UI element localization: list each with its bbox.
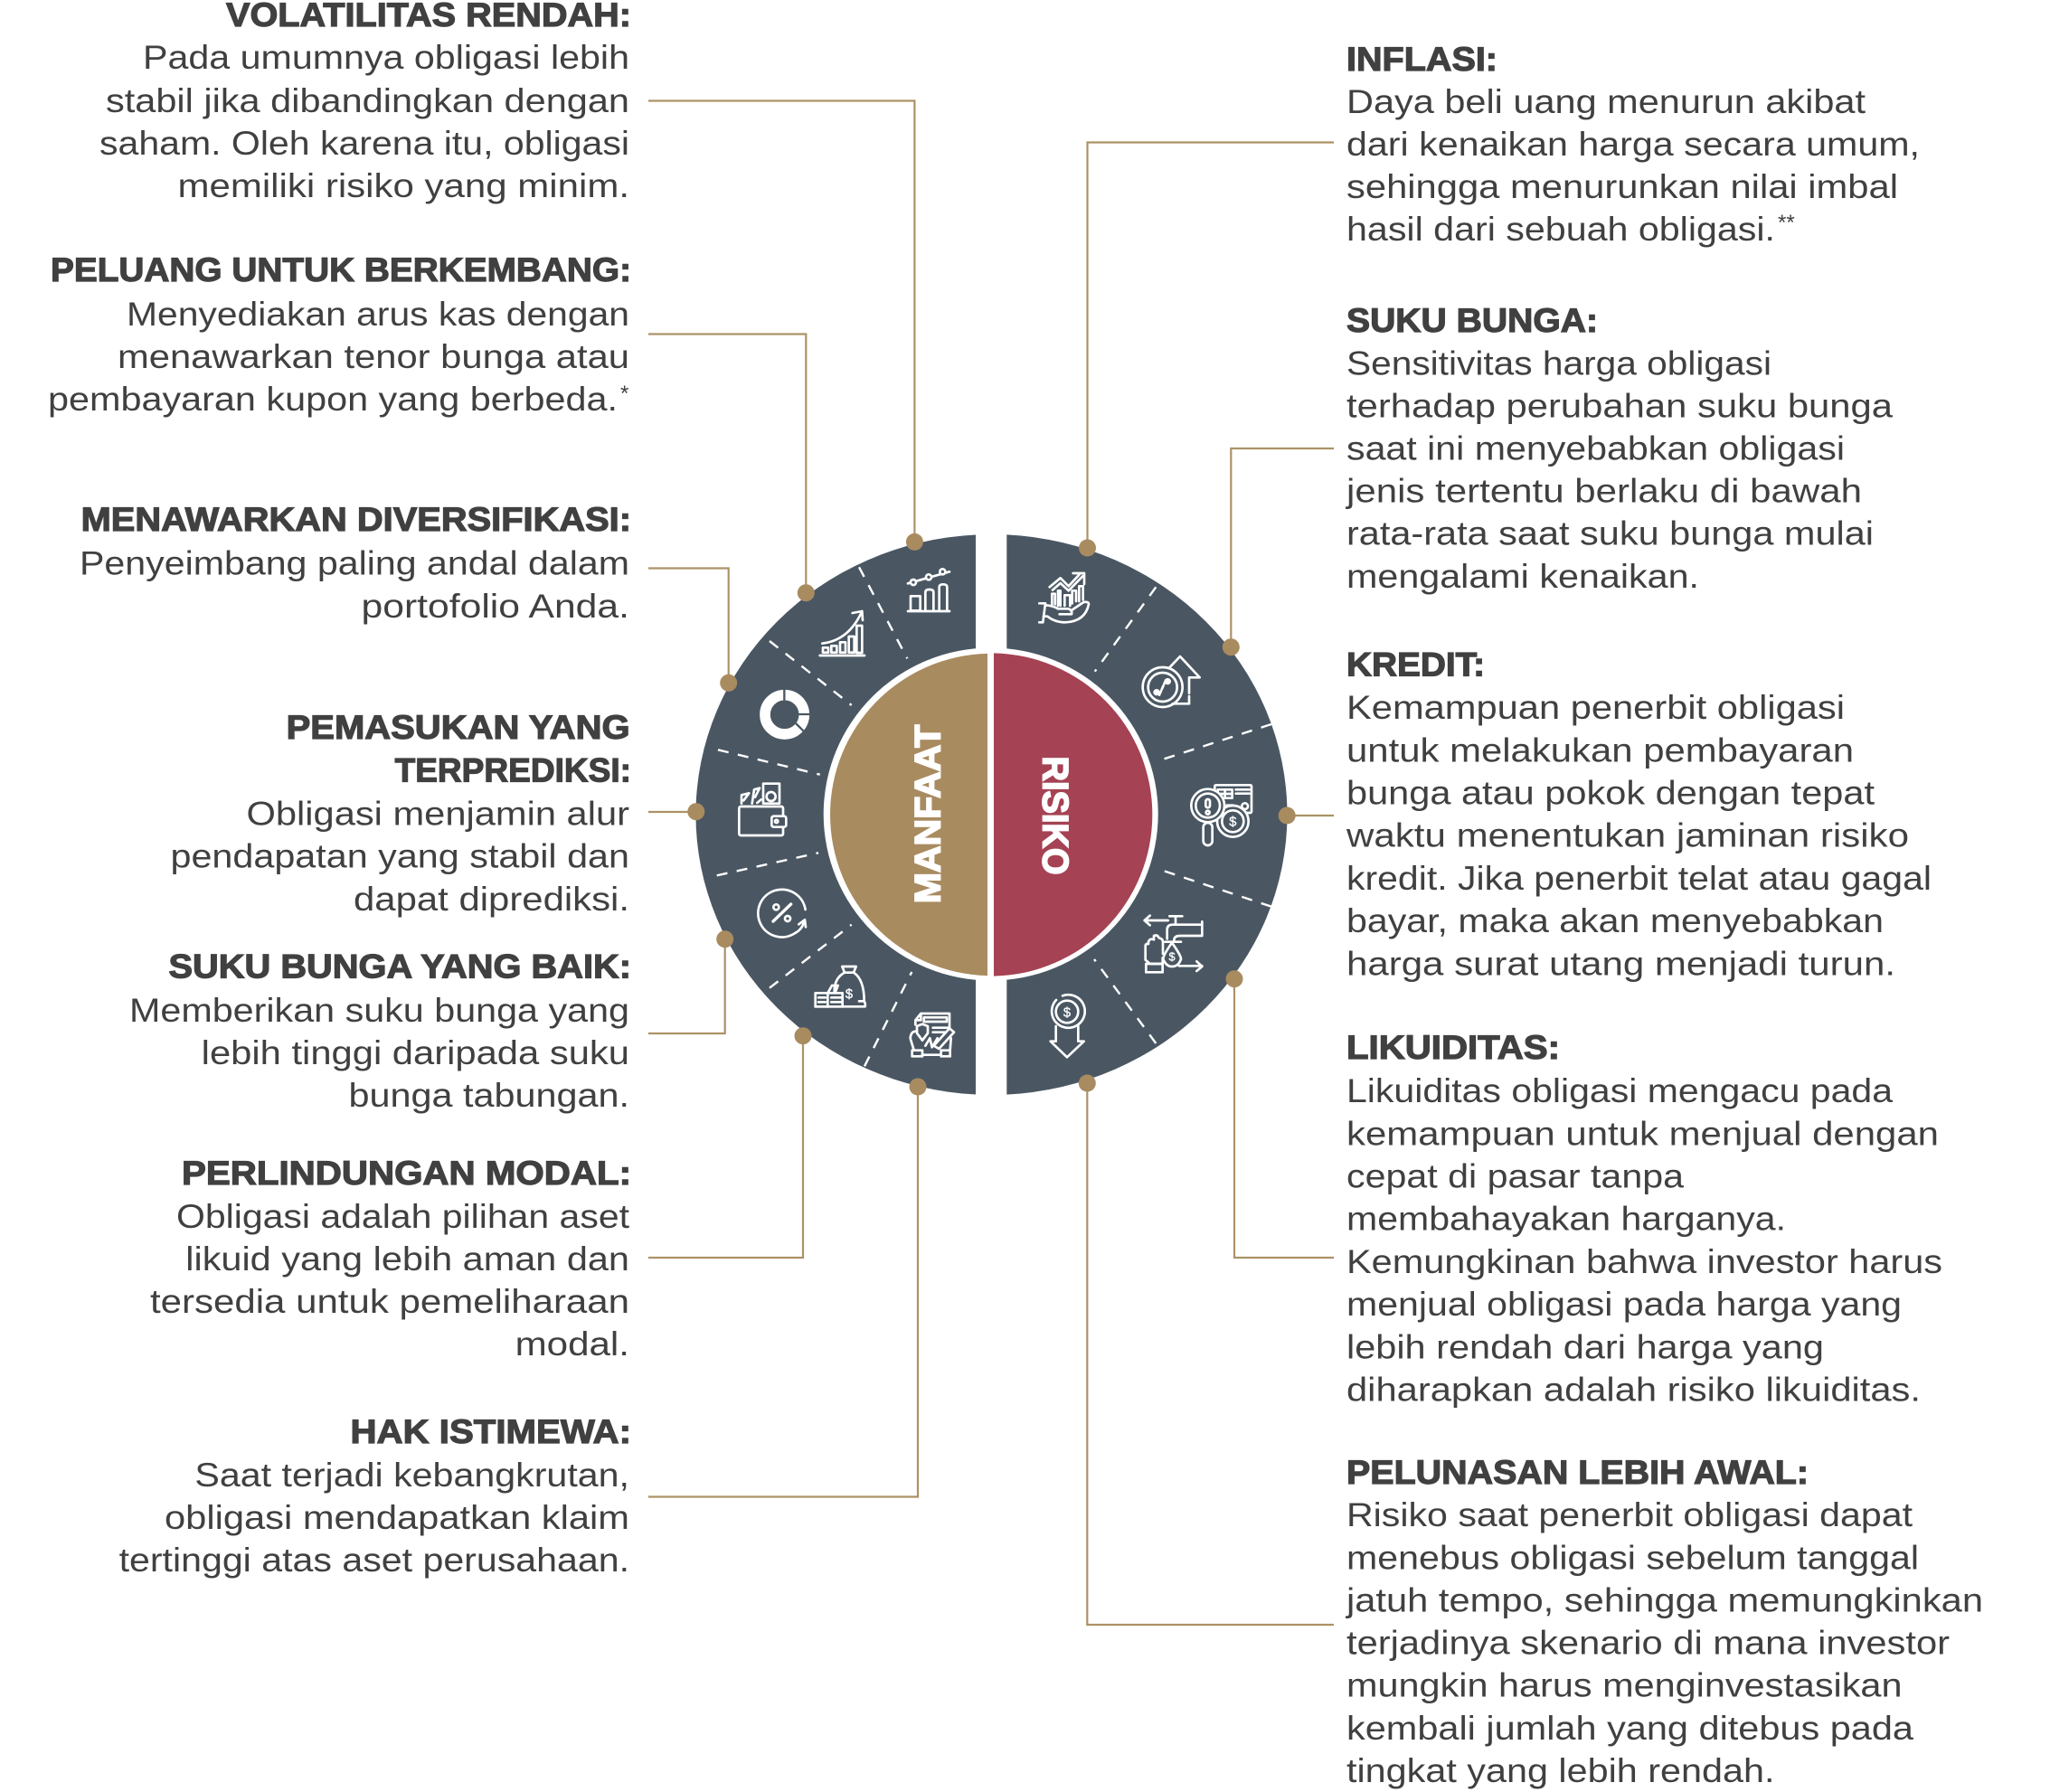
- text block: hak istimewa: HAK ISTIMEWA:: [351, 1412, 631, 1450]
- text block: suku bunga: rata-rata saat suku bunga mulai: [1346, 514, 1874, 552]
- text block: likuiditas: membahayakan harganya.: [1346, 1199, 1786, 1237]
- text block: perlindungan modal: likuid yang lebih aman dan: [185, 1240, 629, 1278]
- text block: suku bunga: terhadap perubahan suku bunga: [1346, 387, 1893, 425]
- icon: growth bars: [820, 611, 864, 655]
- text block: peluang untuk berkembang: Menyediakan arus kas dengan: [127, 295, 629, 333]
- text block: hak istimewa: Saat terjadi kebangkrutan,: [194, 1456, 629, 1494]
- text block: pelunasan lebih awal: Risiko saat penerbit obligasi dapat: [1346, 1495, 1913, 1533]
- icon: coin with down arrow: $: [1063, 1005, 1071, 1020]
- text block: likuiditas: cepat di pasar tanpa: [1346, 1157, 1684, 1195]
- text block: inflasi: hasil dari sebuah obligasi.: [1346, 210, 1775, 248]
- icon: wallet with money: [739, 784, 786, 835]
- icon: donut chart: [765, 689, 811, 734]
- text block: suku bunga: saat ini menyebabkan obligasi: [1346, 429, 1845, 467]
- text block: kredit: [1346, 646, 1932, 982]
- text block: kredit: bayar, maka akan menyebabkan: [1346, 901, 1884, 939]
- text block: suku bunga: SUKU BUNGA:: [1346, 301, 1598, 339]
- text block: pelunasan lebih awal: menebus obligasi sebelum tanggal: [1346, 1539, 1919, 1577]
- text block: inflasi: sehingga menurunkan nilai imbal: [1346, 167, 1898, 205]
- text block: pemasukan yang terprediksi: Obligasi menjamin alur: [246, 794, 629, 832]
- text block: suku bunga: jenis tertentu berlaku di bawah: [1346, 472, 1862, 510]
- text block: kredit: bunga atau pokok dengan tepat: [1346, 774, 1875, 812]
- text block: likuiditas: menjual obligasi pada harga yang: [1346, 1285, 1902, 1323]
- text block: inflasi: Daya beli uang menurun akibat: [1346, 82, 1866, 120]
- text block: kredit: KREDIT:: [1346, 646, 1485, 684]
- text block: menawarkan diversifikasi: Penyeimbang paling andal dalam: [80, 544, 629, 582]
- text block: peluang untuk berkembang: PELUANG UNTUK BERKEMBANG:: [51, 250, 631, 288]
- text block: pemasukan yang terprediksi: PEMASUKAN YANG: [287, 708, 630, 746]
- connector lines: risiko: [1087, 143, 1334, 1625]
- text block: likuiditas: lebih rendah dari harga yang: [1346, 1327, 1824, 1365]
- text block: volatilitas rendah: saham. Oleh karena itu, obligasi: [99, 124, 629, 162]
- text block: suku bunga yang baik: Memberikan suku bunga yang: [129, 991, 629, 1029]
- text block: suku bunga yang baik: lebih tinggi daripada suku: [202, 1033, 629, 1071]
- icon: contract with hands and pen: [911, 1014, 954, 1056]
- text block: inflasi: INFLASI:: [1346, 40, 1497, 78]
- text block: suku bunga: mengalami kenaikan.: [1346, 557, 1699, 595]
- text block: inflasi: dari kenaikan harga secara umum,: [1346, 125, 1920, 163]
- text block: perlindungan modal: [150, 1154, 631, 1363]
- icon: hand holding rising chart: [1039, 573, 1089, 622]
- text block: peluang untuk berkembang: pembayaran kupon yang berbeda.: [48, 380, 618, 418]
- text block: hak istimewa: tertinggi atas aset perusahaan.: [119, 1541, 629, 1579]
- manfaat half disc: [830, 654, 987, 976]
- icon: money bag and bills: [816, 967, 865, 1006]
- white ring separator: [824, 647, 1158, 980]
- icons: risiko side lower: [1051, 916, 1202, 1057]
- risiko half disc: [994, 653, 1152, 976]
- text block: perlindungan modal: modal.: [515, 1325, 629, 1363]
- text block: kredit: waktu menentukan jaminan risiko: [1346, 816, 1909, 854]
- text block: pemasukan yang terprediksi: [170, 708, 631, 918]
- text block: pemasukan yang terprediksi: TERPREDIKSI:: [395, 750, 631, 788]
- icon: volatilitas bar and line chart: [908, 569, 949, 611]
- connector end dots: [687, 533, 1296, 1096]
- text block: pelunasan lebih awal: kembali jumlah yang ditebus pada: [1346, 1709, 1913, 1747]
- text block: perlindungan modal: Obligasi adalah pilihan aset: [176, 1197, 630, 1235]
- text block: pelunasan lebih awal: [1346, 1453, 1983, 1789]
- text block: inflasi: [1346, 40, 1920, 248]
- text block: pelunasan lebih awal: jatuh tempo, sehingga memungkinkan: [1346, 1580, 1983, 1618]
- text block: pelunasan lebih awal: mungkin harus menginvestasikan: [1346, 1665, 1903, 1703]
- text block: volatilitas rendah: [99, 0, 631, 204]
- dark ring: left half: [695, 534, 976, 1095]
- text block: kredit: untuk melakukan pembayaran: [1346, 731, 1854, 769]
- text block: suku bunga yang baik: SUKU BUNGA YANG BAIK:: [168, 948, 631, 986]
- label: manfaat: MANFAAT: [908, 725, 948, 903]
- text block: hak istimewa: [119, 1412, 631, 1579]
- text block: likuiditas: diharapkan adalah risiko likuiditas.: [1346, 1371, 1921, 1409]
- text block: suku bunga yang baik: bunga tabungan.: [349, 1076, 629, 1114]
- connector lines: manfaat: [648, 101, 918, 1497]
- text block: inflasi: **: [1778, 211, 1795, 235]
- text block: likuiditas: Likuiditas obligasi mengacu pada: [1346, 1071, 1893, 1109]
- text block: pelunasan lebih awal: terjadinya skenario di mana investor: [1346, 1624, 1950, 1662]
- text block: volatilitas rendah: stabil jika dibandingkan dengan: [106, 81, 629, 119]
- text block: hak istimewa: obligasi mendapatkan klaim: [165, 1498, 629, 1536]
- icon: percent cycle: [758, 890, 806, 937]
- icons: risiko side upper: [1039, 573, 1252, 845]
- text block: likuiditas: [1346, 1028, 1942, 1409]
- text block: kredit: harga surat utang menjadi turun.: [1346, 944, 1895, 982]
- text block: peluang untuk berkembang: [48, 250, 631, 418]
- text block: suku bunga: Sensitivitas harga obligasi: [1346, 344, 1771, 382]
- text block: likuiditas: kemampuan untuk menjual dengan: [1346, 1114, 1939, 1152]
- text block: peluang untuk berkembang: *: [620, 382, 628, 406]
- text block: suku bunga yang baik: [129, 948, 631, 1114]
- text block: peluang untuk berkembang: menawarkan tenor bunga atau: [118, 337, 629, 375]
- text block: perlindungan modal: PERLINDUNGAN MODAL:: [182, 1154, 631, 1192]
- icon: money bag and bills: $: [846, 987, 853, 1002]
- icon: tap with hand and money drop: [1145, 916, 1202, 972]
- text block: menawarkan diversifikasi: MENAWARKAN DIVERSIFIKASI:: [81, 500, 631, 538]
- text block: volatilitas rendah: memiliki risiko yang minim.: [177, 166, 629, 204]
- text block: kredit: Kemampuan penerbit obligasi: [1346, 688, 1845, 726]
- dark ring: right half: [1006, 534, 1287, 1095]
- text block: likuiditas: Kemungkinan bahwa investor harus: [1346, 1242, 1942, 1280]
- icons: manfaat side: [739, 569, 954, 1056]
- icon: magnifier with credit report: [1191, 785, 1252, 845]
- icon: magnifier with credit report: $: [1229, 816, 1236, 830]
- text block: pelunasan lebih awal: PELUNASAN LEBIH AWAL:: [1346, 1453, 1809, 1491]
- text block: suku bunga: [1346, 301, 1893, 595]
- dashed segment dividers: [717, 567, 1271, 1066]
- text block: pemasukan yang terprediksi: dapat diprediksi.: [354, 880, 629, 918]
- text block: menawarkan diversifikasi: portofolio Anda.: [362, 587, 629, 625]
- text block: perlindungan modal: tersedia untuk pemeliharaan: [150, 1282, 629, 1320]
- text block: likuiditas: LIKUIDITAS:: [1346, 1028, 1560, 1066]
- text block: pemasukan yang terprediksi: pendapatan yang stabil dan: [170, 837, 629, 875]
- text block: kredit: kredit. Jika penerbit telat atau gagal: [1346, 859, 1932, 897]
- text block: pelunasan lebih awal: tingkat yang lebih rendah.: [1346, 1751, 1774, 1789]
- text block: menawarkan diversifikasi: [80, 500, 631, 625]
- label: risiko: RISIKO: [1034, 756, 1074, 875]
- icon: coin with down arrow: [1051, 995, 1085, 1057]
- icon: tap with hand and money drop: $: [1168, 951, 1176, 964]
- icon: interest rate coin with up arrow: [1143, 656, 1200, 707]
- circular wheel diagram: [687, 533, 1296, 1096]
- text block: volatilitas rendah: Pada umumnya obligasi lebih: [143, 38, 629, 76]
